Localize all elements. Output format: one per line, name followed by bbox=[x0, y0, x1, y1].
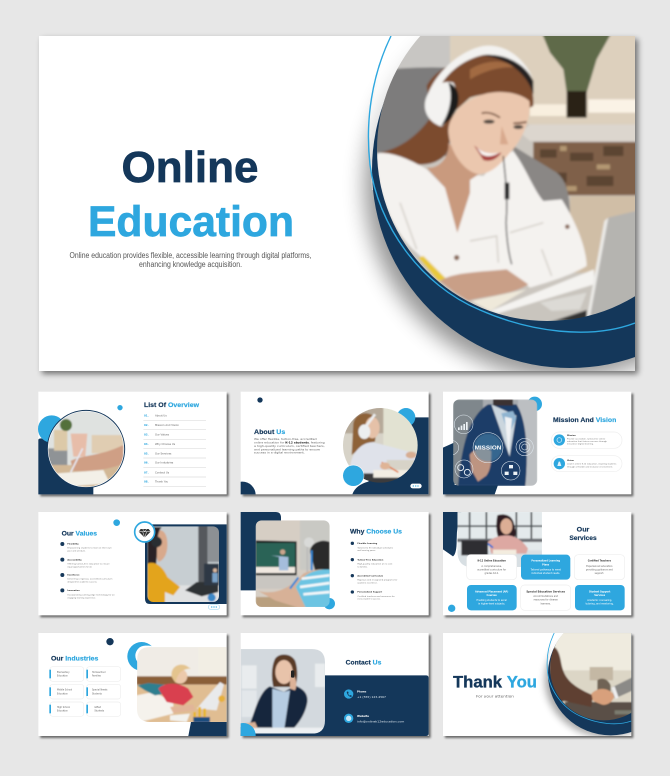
industry cards: Education bbox=[57, 710, 69, 713]
list items: 05. bbox=[144, 451, 149, 455]
closing artwork: curved photo frame bbox=[540, 633, 632, 736]
slide number pill bbox=[208, 605, 220, 609]
photo: support agent with headset bbox=[240, 648, 326, 734]
value items: Innovation bbox=[67, 589, 80, 592]
heading: Our Industries bbox=[51, 656, 99, 663]
reason items: and learning paces. bbox=[357, 549, 376, 552]
card: vision: through a flexible and inclusive environment. bbox=[567, 465, 613, 468]
heading: Mission And Vision bbox=[553, 417, 616, 424]
service cards: Student Support bbox=[589, 590, 611, 593]
reason items: to families. bbox=[357, 565, 368, 568]
paragraph: and personalized learning paths to ensure bbox=[254, 447, 320, 451]
value items: Excellence bbox=[67, 575, 80, 577]
panel: our values bbox=[38, 512, 229, 617]
list items bbox=[143, 414, 206, 486]
photo: writing at desk bbox=[47, 410, 127, 488]
service cards: support. bbox=[595, 572, 604, 575]
service cards: A comprehensive, bbox=[481, 565, 502, 568]
service cards: learners. bbox=[541, 602, 551, 605]
heading: Why Choose Us bbox=[350, 529, 402, 536]
industry cards: Elementary bbox=[57, 671, 70, 674]
card: mission bbox=[551, 432, 622, 448]
card: mission: Mission bbox=[567, 435, 576, 437]
service cards: Enabling students to excel bbox=[477, 599, 507, 602]
value items: Flexibility bbox=[67, 543, 79, 546]
contact: website: info@onlinek12education.com bbox=[357, 719, 405, 723]
service cards: Plans bbox=[542, 563, 550, 566]
title bbox=[88, 143, 294, 246]
value items: Accessibility bbox=[67, 558, 82, 561]
list items: Our Services bbox=[155, 451, 172, 455]
headphones bbox=[428, 44, 532, 94]
subtitle text block: Online education provides flexible, accessible learning through digital platforms, bbox=[70, 251, 312, 260]
panel: title slide bbox=[38, 35, 642, 378]
photo: handshake bbox=[548, 632, 633, 722]
title: Education bbox=[88, 198, 294, 246]
reason items: academic excellence. bbox=[357, 582, 378, 584]
shirt bbox=[377, 151, 587, 288]
panel: mission and vision bbox=[443, 392, 633, 496]
service cards bbox=[467, 555, 625, 610]
service cards: Experienced educators bbox=[586, 565, 613, 568]
panel: contact us bbox=[240, 633, 432, 740]
paragraph: online education for K-12 students , featuring bbox=[254, 440, 325, 444]
reason items: Flexible Learning bbox=[357, 542, 378, 545]
service cards: tutoring, and mentoring. bbox=[586, 603, 614, 606]
list items: Contact Us bbox=[155, 470, 170, 474]
list items: 07. bbox=[144, 470, 149, 474]
value items: engaging learning experience. bbox=[67, 596, 96, 599]
industry cards: Gifted bbox=[94, 706, 102, 709]
list items: Our Industries bbox=[155, 461, 174, 465]
face bbox=[448, 92, 530, 174]
industry cards: Education bbox=[57, 692, 69, 695]
service cards: Advanced Placement (AP) bbox=[475, 590, 508, 593]
card: vision bbox=[551, 456, 622, 472]
list items: 02. bbox=[144, 423, 149, 427]
service cards: Personalized Learning bbox=[531, 560, 560, 563]
slide number pill bbox=[410, 484, 422, 488]
industry cards: Special Needs bbox=[92, 689, 108, 692]
title: Online bbox=[122, 143, 258, 192]
reason items: High-quality education at no cost bbox=[357, 562, 393, 565]
industry cards: Homeschool bbox=[92, 671, 106, 674]
reason items: Accredited Curriculum bbox=[357, 574, 383, 577]
industry cards: Families bbox=[92, 675, 102, 678]
industry cards: Students bbox=[92, 692, 103, 695]
panel: why choose us bbox=[241, 512, 431, 617]
service cards: Accommodations and bbox=[533, 595, 559, 598]
list items: 01. bbox=[144, 414, 149, 418]
industry cards bbox=[49, 667, 121, 716]
list items: Our Values bbox=[155, 433, 170, 437]
value items: Incorporating cutting-edge technology for an bbox=[67, 593, 116, 596]
photo: woman with headphones at laptop bbox=[377, 36, 635, 321]
card: mission: education that fosters success through bbox=[567, 440, 608, 443]
panel: our services bbox=[443, 511, 633, 617]
photo: businessman with mission icons: MISSION bbox=[475, 446, 501, 452]
paragraph bbox=[254, 437, 325, 455]
photo: boy in online class bbox=[255, 520, 330, 608]
list items: Mission And Vision bbox=[155, 423, 179, 427]
paragraph: success in a digital environment. bbox=[254, 451, 305, 455]
heading: Services bbox=[569, 535, 597, 542]
contact: phone: +1 (555) 123-4567 bbox=[357, 695, 386, 699]
card: vision: Vision bbox=[567, 460, 575, 462]
value items: Delivering a rigorous, accredited curriculum bbox=[67, 578, 113, 581]
contact: phone bbox=[344, 689, 386, 699]
service cards: Special Education Services bbox=[526, 590, 566, 593]
photo: student at computer bbox=[147, 525, 220, 604]
list items: 04. bbox=[144, 442, 149, 446]
heading: Contact Us bbox=[346, 660, 382, 666]
paragraph: We offer flexible, tuition-free, accredited bbox=[254, 437, 317, 441]
photo: child on floor with laptop bbox=[137, 646, 227, 723]
list items: 03. bbox=[144, 433, 149, 437]
value items: equal opportunities for all. bbox=[67, 565, 93, 568]
heading: About Us bbox=[254, 429, 286, 436]
service cards: Services bbox=[594, 594, 606, 597]
reason items: every student's success. bbox=[357, 598, 381, 601]
service cards: resources for diverse bbox=[534, 599, 558, 602]
panel: list of overview bbox=[38, 392, 229, 496]
reason items: Tuition-Free Education bbox=[357, 558, 384, 561]
list items: Why Choose Us bbox=[155, 442, 176, 446]
service cards: Courses bbox=[487, 594, 497, 597]
reason items bbox=[351, 542, 398, 601]
contact: website: Website bbox=[357, 714, 369, 718]
heading: Thank You bbox=[453, 673, 537, 691]
panel: about us bbox=[240, 392, 432, 498]
service cards: individual student needs. bbox=[531, 572, 560, 575]
reason items: Tailored to fit individual schedules bbox=[357, 546, 393, 549]
value items bbox=[60, 542, 116, 599]
industry cards: Students bbox=[94, 710, 105, 713]
service cards: K-12 Online Education bbox=[477, 560, 506, 563]
subtitle text block: enhancing knowledge acquisition. bbox=[139, 260, 242, 269]
heading: List Of Overview bbox=[144, 402, 200, 409]
card: mission: innovative digital learning. bbox=[567, 443, 594, 446]
value items: Offering tuition-free education to ensure bbox=[67, 562, 111, 565]
heading bbox=[569, 527, 597, 542]
icon: diamond badge bbox=[135, 522, 155, 542]
service cards: in higher-level subjects. bbox=[478, 603, 505, 606]
value items: Empowering students to learn at their own bbox=[67, 547, 113, 550]
value items: pace and schedule. bbox=[67, 551, 86, 553]
list items: Thank You bbox=[155, 480, 169, 484]
card: mission: Provide accessible, tuition-free online bbox=[567, 437, 606, 440]
list items: 06. bbox=[144, 461, 149, 465]
contact: phone: Phone bbox=[357, 690, 367, 694]
subtitle text block bbox=[70, 251, 312, 269]
list items: 08. bbox=[144, 480, 149, 484]
panel: our industries bbox=[38, 633, 229, 738]
value items: designed for academic success. bbox=[67, 581, 98, 584]
subtitle: For your attention bbox=[476, 694, 514, 698]
service cards: Certified Teachers bbox=[588, 560, 612, 563]
service cards: providing guidance and bbox=[586, 568, 613, 571]
service cards: accredited curriculum for bbox=[477, 568, 506, 571]
reason items: Certified teachers and resources for bbox=[357, 595, 395, 598]
service cards: Academic counseling, bbox=[587, 599, 612, 602]
photo: child with headphones bbox=[342, 407, 420, 485]
list items: About Us bbox=[155, 414, 167, 418]
hair bbox=[380, 54, 533, 165]
heading: Our bbox=[577, 527, 590, 534]
service cards: grades K-12. bbox=[485, 572, 499, 575]
photo: woman at laptop by window bbox=[457, 511, 543, 569]
thin blue arc bbox=[368, 36, 635, 332]
heading: Our Values bbox=[62, 530, 97, 537]
title slide artwork: curved photo frame bbox=[351, 36, 635, 371]
contact: website bbox=[344, 714, 405, 723]
panel: thank you bbox=[443, 633, 635, 740]
paragraph: a high-quality curriculum, certified teachers, bbox=[254, 444, 325, 448]
reason items: Personalized Support bbox=[357, 591, 382, 594]
photo: businessman with mission icons bbox=[444, 399, 537, 486]
industry cards: Middle School bbox=[57, 689, 73, 692]
industry cards: High School bbox=[57, 706, 70, 709]
industry cards: Education bbox=[57, 675, 69, 678]
service cards: Tailored pathways to meet bbox=[531, 568, 561, 571]
reason items: Rigorous and recognized programs for bbox=[357, 579, 398, 582]
card: vision: Lead in online K-12 education, inspiring students bbox=[567, 462, 616, 465]
hands, pencil, notebook bbox=[418, 256, 446, 281]
